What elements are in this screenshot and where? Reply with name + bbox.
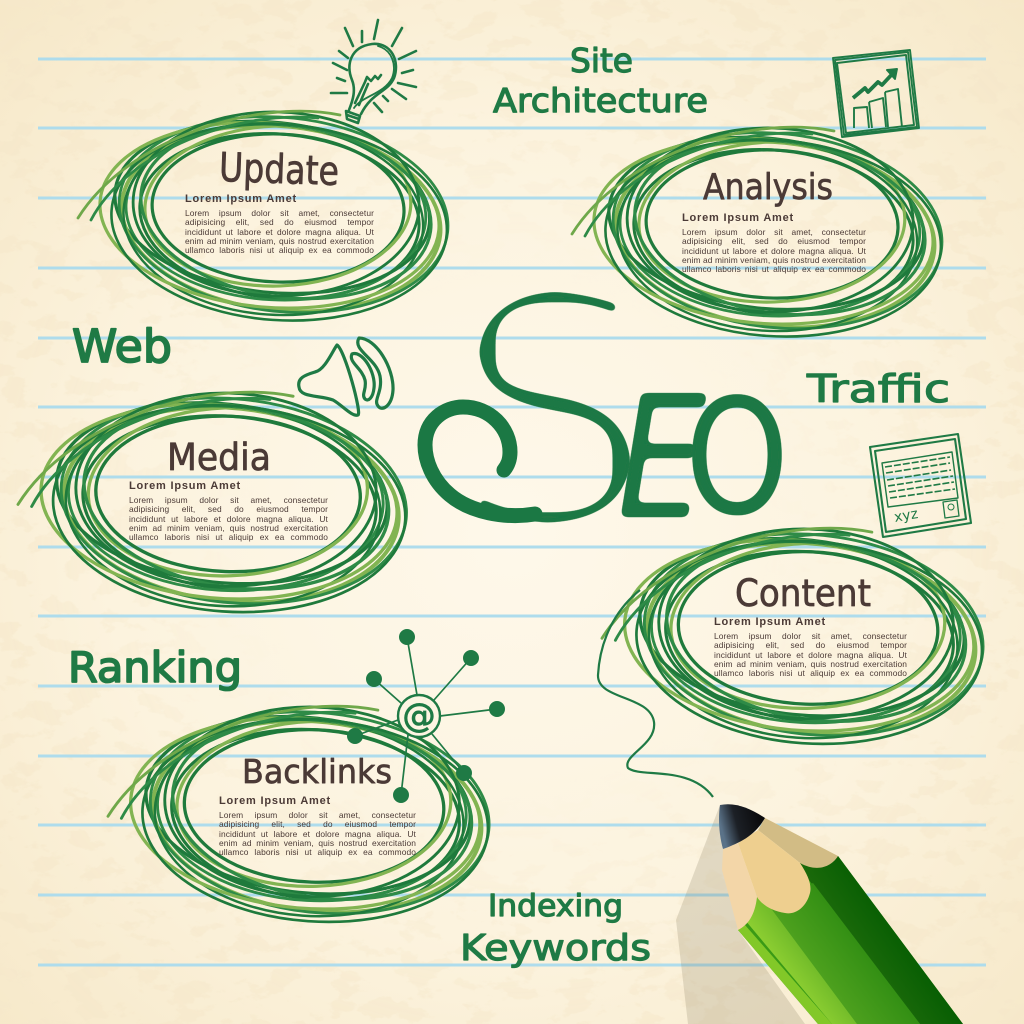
label: indexing: Indexing: [488, 889, 623, 924]
text block: content: [714, 616, 907, 678]
icon: chart frame: [833, 50, 919, 137]
scribble circle: analysis: [572, 117, 952, 348]
SEO title: O: [685, 364, 789, 551]
text block: media: enim ad minim veniam, quis nostrud exercitation: [129, 523, 328, 533]
text block: analysis: enim ad minim veniam, quis nostrud exercitation: [682, 255, 866, 265]
text block: backlinks: adipisicing elit, sed do eiusmod tempor: [219, 819, 416, 829]
text block: content: Lorem ipsum dolor sit amet, consectetur: [714, 631, 907, 641]
text block: content: incididunt ut labore et dolore magna aliqua. Ut: [714, 650, 907, 660]
label: ranking: Ranking: [68, 643, 242, 692]
pencil line: [598, 590, 713, 797]
pencil: [676, 804, 963, 1024]
icon: at-sign network: [348, 630, 504, 802]
heading: update: Update: [218, 145, 340, 195]
icon: document: xyz: [893, 506, 919, 526]
scribble circle: media: [18, 381, 417, 624]
text block: media: incididunt ut labore et dolore magna aliqua. Ut: [129, 514, 328, 524]
icon: light bulb: [331, 20, 416, 123]
text block: update: ullamco laboris nisi ut aliquip ex ea commodo: [185, 245, 374, 255]
label: traffic: Traffic: [806, 367, 950, 411]
text block: update: enim ad minim veniam, quis nostrud exercitation: [185, 236, 374, 246]
text block: content: Lorem Ipsum Amet: [714, 616, 826, 628]
label: keywords: Keywords: [460, 928, 651, 969]
SEO title: [425, 223, 789, 603]
text block: update: adipisicing elit, sed do eiusmod tempor: [185, 217, 374, 227]
text block: update: incididunt ut labore et dolore magna aliqua. Ut: [185, 226, 374, 236]
icon: at-sign network: @: [402, 696, 436, 735]
heading: media: Media: [167, 436, 271, 479]
text block: backlinks: [219, 795, 416, 857]
text block: content: adipisicing elit, sed do eiusmod tempor: [714, 640, 907, 650]
text block: analysis: ullamco laboris nisi ut aliquip ex ea commodo: [682, 264, 866, 274]
heading: backlinks: Backlinks: [242, 752, 392, 791]
text block: analysis: [682, 212, 866, 274]
scribble circle: content: [602, 518, 993, 755]
text block: content: ullamco laboris nisi ut aliquip ex ea commodo: [714, 668, 907, 678]
SEO title: E: [617, 360, 707, 558]
text block: backlinks: ullamco laboris nisi ut aliquip ex ea commodo: [219, 847, 416, 857]
scribble circle: update: [78, 101, 458, 332]
text block: analysis: incididunt ut labore et dolore magna aliqua. Ut: [682, 246, 866, 256]
text block: backlinks: Lorem ipsum dolor sit amet, consectetur: [219, 810, 416, 820]
text block: update: [185, 193, 374, 255]
text block: media: Lorem ipsum dolor sit amet, consectetur: [129, 495, 328, 505]
text block: backlinks: enim ad minim veniam, quis nostrud exercitation: [219, 838, 416, 848]
heading: content: Content: [735, 572, 871, 615]
label: site architecture: Architecture: [493, 81, 708, 120]
text block: analysis: Lorem ipsum dolor sit amet, consectetur: [682, 227, 866, 237]
label: web: Web: [72, 320, 172, 373]
text block: content: enim ad minim veniam, quis nostrud exercitation: [714, 659, 907, 669]
text block: backlinks: incididunt ut labore et dolore magna aliqua. Ut: [219, 828, 416, 838]
text block: media: ullamco laboris nisi ut aliquip ex ea commodo: [129, 532, 328, 542]
icon: document: [870, 434, 971, 537]
text block: media: Lorem Ipsum Amet: [129, 480, 241, 492]
scribble circle: backlinks: [108, 696, 499, 933]
text block: analysis: adipisicing elit, sed do eiusmod tempor: [682, 236, 866, 246]
text block: update: Lorem Ipsum Amet: [185, 193, 297, 205]
text block: media: adipisicing elit, sed do eiusmod tempor: [129, 504, 328, 514]
SEO title: S: [450, 223, 656, 603]
text block: update: Lorem ipsum dolor sit amet, consectetur: [185, 208, 374, 218]
heading: analysis: Analysis: [703, 167, 833, 208]
text block: media: [129, 480, 328, 542]
label: site architecture: Site: [570, 41, 633, 80]
icon: megaphone: [299, 338, 393, 415]
label: site architecture: [493, 41, 708, 120]
text block: backlinks: Lorem Ipsum Amet: [219, 795, 331, 807]
text block: analysis: Lorem Ipsum Amet: [682, 212, 794, 224]
